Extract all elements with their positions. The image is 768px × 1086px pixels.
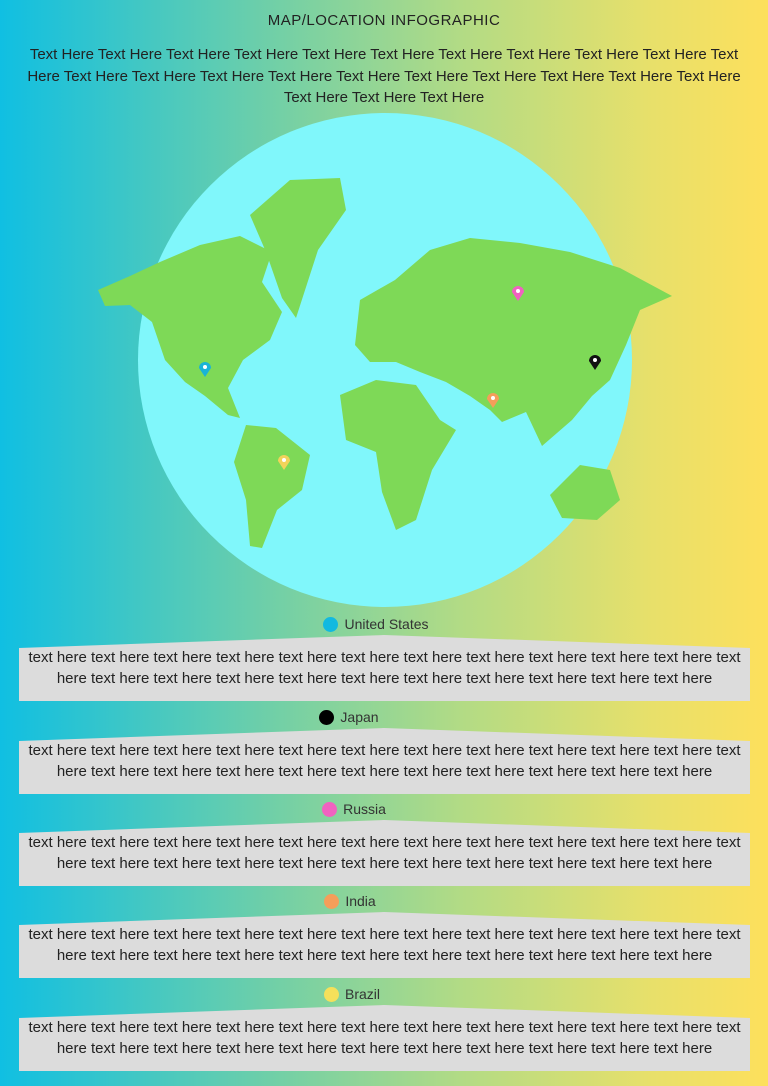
panel: United States <box>19 635 750 701</box>
panel: United States: text here text here text here text here text here text here text here text here text here text here text here text here text here text here text here text here text here text here text here text here text here text here <box>28 649 741 686</box>
panel: Russia: text here text here text here text here text here text here text here text here text here text here text here text here text here text here text here text here text here text here text here text here text here text here <box>28 834 741 872</box>
label: India <box>324 893 376 909</box>
panel: Japan: text here text here text here text here text here text here text here text here text here text here text here text here text here text here text here text here text here text here text here text here text here text here <box>28 742 741 780</box>
panel: Japan <box>19 728 750 794</box>
subtitle text: Text Here Text Here Text Here Text Here Text Here Text Here Text Here Text Here Text Here Text Here Text Here Text Here Text Here Text Here Text Here Text Here Text Here Text Here Text Here Text Here Text Here Text Here Text Here Text Here <box>27 46 741 106</box>
panel: Brazil: text here text here text here text here text here text here text here text here text here text here text here text here text here text here text here text here text here text here text here text here text here text here <box>28 1019 741 1056</box>
label: Russia <box>322 801 386 817</box>
label: Brazil: Brazil <box>345 986 380 1002</box>
panel: Brazil <box>19 1005 750 1071</box>
label: Brazil <box>324 986 380 1002</box>
label: Japan <box>319 709 379 725</box>
label: United States: United States <box>344 616 429 632</box>
label: Japan: Japan <box>340 709 379 725</box>
label: Russia: Russia <box>343 801 386 817</box>
label: India: India <box>345 893 376 909</box>
title: MAP/LOCATION INFOGRAPHIC <box>268 12 500 29</box>
world map globe <box>98 113 672 607</box>
panel: India <box>19 912 750 978</box>
pins <box>199 286 601 470</box>
panel: Russia <box>19 820 750 886</box>
panel: India: text here text here text here text here text here text here text here text here text here text here text here text here text here text here text here text here text here text here text here text here text here text here <box>28 926 741 964</box>
